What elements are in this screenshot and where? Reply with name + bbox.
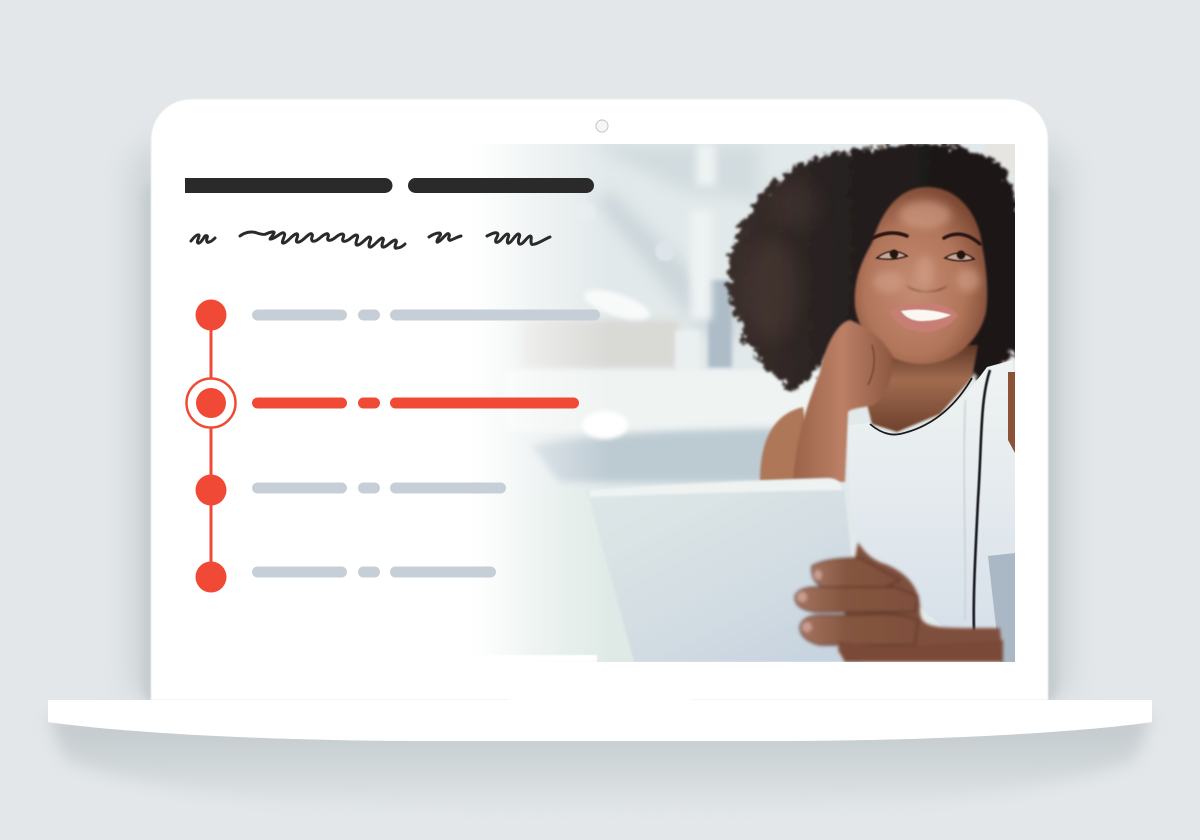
photo backdrop [470,144,1030,662]
laptop lid [151,99,1048,700]
eyes [877,250,974,261]
right shoulder arm [1006,372,1020,460]
left arm and fist [760,320,892,482]
step 1 label bars [252,310,600,320]
grey object right [988,553,1015,662]
handwritten subtitle squiggle [191,232,550,248]
laptop illustration scene [48,100,1152,794]
step 3 label bars [252,482,506,494]
step 2 label bars [252,398,579,408]
title bars [185,178,594,193]
step 1 node [196,300,226,330]
left fade to white [470,144,590,662]
lower hand on tablet [795,542,1003,662]
mouth [890,304,958,332]
timeline [186,300,600,592]
face [855,187,987,364]
step 2 active node [186,378,236,428]
step 4 label bars [252,566,496,578]
laptop base [48,699,1152,741]
fingers [795,558,918,645]
timeline connector [210,315,212,577]
nails [797,570,822,632]
step 4 node [196,562,226,592]
hair [728,144,1025,390]
step 3 node [196,474,226,506]
photo: woman with tablet [508,144,1015,662]
tablet [587,478,862,662]
shadows [48,140,1152,815]
neck [866,345,978,432]
webcam [596,120,608,132]
dress [869,360,1015,630]
nose shadow [906,285,948,292]
palm edge [838,640,1003,662]
face highlights [873,201,980,293]
eyebrows [873,233,980,244]
white bottom strip [508,654,598,662]
